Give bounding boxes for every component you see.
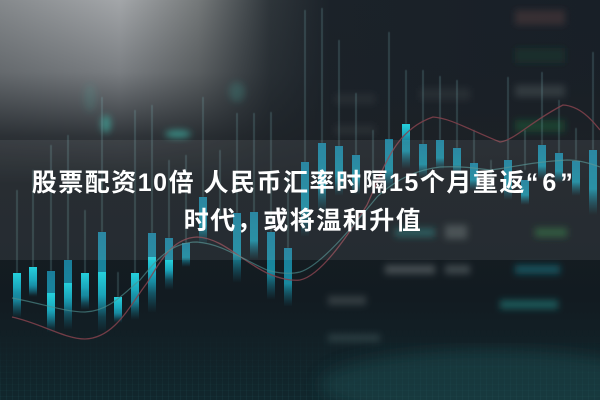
title: 股票配资10倍 人民币汇率时隔15个月重返“6” [32, 169, 574, 197]
candlestick wicks [17, 8, 593, 297]
grid texture on the floor [0, 378, 373, 397]
moving average line: teal [12, 160, 600, 312]
teal floor glow [320, 350, 600, 400]
title: 时代，或将温和升值 [184, 207, 422, 235]
candlestick bodies [13, 124, 597, 333]
bright candle segments [13, 124, 410, 328]
translucent title band [0, 140, 600, 260]
blurred teal lights upper left [84, 82, 245, 138]
blurred data table on the right [328, 10, 567, 342]
moving average line: red [12, 105, 600, 339]
title [32, 169, 574, 235]
